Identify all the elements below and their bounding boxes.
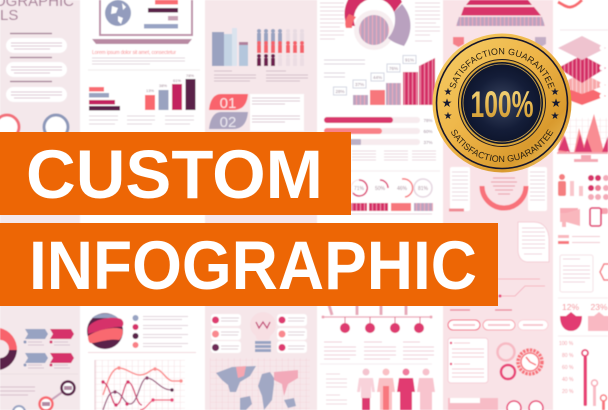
pill labels: [448, 320, 548, 330]
icon: city buildings: [212, 28, 248, 66]
banner: INFOGRAPHIC: [0, 223, 498, 306]
thermometer chart: 100 %: [559, 341, 574, 347]
world map: [210, 358, 310, 410]
thermometer chart: 40 %: [562, 377, 574, 383]
vertical bar chart: 38%: [159, 83, 167, 88]
icon: phone: [590, 208, 601, 226]
panel: buildings and people: [209, 28, 308, 131]
text card left: [450, 167, 470, 211]
icon: stars: ★: [551, 96, 561, 110]
small text cards: [326, 374, 347, 404]
panel: stacked layers and area chart: [557, 0, 608, 214]
growth bar chart: [353, 58, 435, 105]
icon: hexagon badge: [600, 264, 608, 280]
step 01: 01: [220, 95, 236, 112]
panel: pyramid and rings: [450, 0, 547, 211]
badge: satisfaction guarantee seal: [432, 34, 572, 172]
banner: CUSTOM: [0, 132, 351, 215]
vertical bar chart: 61%: [173, 78, 181, 83]
ring gauges: 71%: [354, 186, 365, 192]
callout lines: [498, 279, 545, 296]
thermometer chart: 80 %: [562, 353, 574, 359]
ring gauges: [351, 179, 432, 197]
icon: gears: [498, 344, 542, 379]
percent tags: 37%: [355, 82, 364, 87]
ring gauges: 46%: [397, 186, 408, 192]
arrow labels: [24, 329, 74, 368]
line chart: [95, 360, 185, 410]
banner text: CUSTOM: CUSTOM: [26, 136, 323, 213]
icon: stars: ★: [551, 111, 560, 122]
icon: stars: [442, 87, 561, 122]
stat: 23%: [588, 302, 608, 331]
stat: 12%: [560, 302, 582, 331]
vertical bar chart: 78%: [186, 73, 194, 78]
stat: 12%: 12%: [562, 302, 579, 312]
striped ball: [87, 313, 123, 349]
panel: pink column lower: [448, 210, 549, 410]
legend bullets: [132, 315, 188, 348]
donut chart: [0, 328, 17, 350]
badge text: top arc: SATISFACTION GUARANTEE: [450, 48, 555, 89]
timeline: [322, 305, 432, 333]
stat: 23%: 23%: [590, 302, 608, 312]
text card: [560, 255, 593, 292]
percent tags: [334, 56, 416, 95]
bullet text columns: [324, 342, 434, 359]
progress bars: 60%: [423, 129, 433, 134]
donut chart: [345, 0, 410, 50]
percent tags: 28%: [335, 89, 345, 94]
icon: laptop: [100, 0, 192, 35]
panel: ball and line chart: [87, 313, 196, 410]
icon: stars: ★: [444, 111, 453, 122]
badge text: bottom arc: SATISFACTION GUARANTEE: [451, 129, 554, 162]
percent tags: 76%: [389, 66, 398, 71]
ring gauges: 81%: [418, 186, 429, 192]
horizontal bar chart: [89, 87, 120, 110]
icon: stars: ★: [551, 87, 560, 98]
right legend pills: [277, 314, 307, 353]
thermometer chart: [559, 341, 606, 410]
vertical bar chart: [145, 73, 196, 110]
area chart: [557, 114, 608, 162]
network nodes: [13, 382, 74, 410]
panel: laptop and bar charts: [88, 0, 200, 124]
thermometer chart: 20 %: [562, 389, 574, 395]
icon: light bulb: [250, 312, 276, 352]
text card: [518, 222, 549, 262]
icon: four people figures: [357, 368, 435, 410]
icon: globe ring: [0, 115, 19, 139]
icon: megaphone: [560, 209, 580, 227]
panel: bottom-left arrows: [0, 328, 78, 410]
vertical bar chart: 13%: [146, 88, 154, 93]
progress bars: 37%: [423, 140, 433, 145]
panel: donut and growth chart: [320, 0, 440, 214]
text card right: [528, 167, 547, 211]
subheading: Lorem ipsum dolor sit amet, consectetur: [92, 50, 176, 56]
ring gauges: 50%: [375, 186, 386, 192]
ring chart: [482, 186, 526, 208]
percent tags: 91%: [405, 58, 414, 62]
icon: person and dots: [558, 174, 608, 200]
icon: stars: ★: [442, 96, 452, 110]
stacked layers: [558, 36, 606, 105]
panel: top-left list template: LS: [0, 7, 18, 24]
panel: timeline and people: [320, 305, 435, 410]
pyramid chart: [456, 0, 545, 26]
panel: megaphone, phone and stats: [558, 208, 608, 410]
percent tags: 44%: [373, 75, 382, 80]
banner text: INFOGRAPHIC: INFOGRAPHIC: [29, 227, 477, 304]
icon: globe: [105, 0, 131, 26]
icon: share ring: [44, 115, 68, 139]
icon: people rows: [257, 29, 304, 66]
progress bars: 78%: [423, 118, 433, 123]
step 02: 02: [220, 114, 236, 131]
progress bars: [324, 117, 433, 145]
panel: bulb and world map: [210, 312, 310, 410]
icon: stars: ★: [444, 87, 453, 98]
text card with bullets: [448, 338, 488, 383]
panel: top-left list template: [0, 0, 74, 139]
thermometer chart: 60 %: [562, 365, 574, 371]
left legend pills: [211, 314, 241, 353]
colored label row: [351, 203, 433, 211]
badge text: 100%: 100%: [470, 84, 534, 125]
